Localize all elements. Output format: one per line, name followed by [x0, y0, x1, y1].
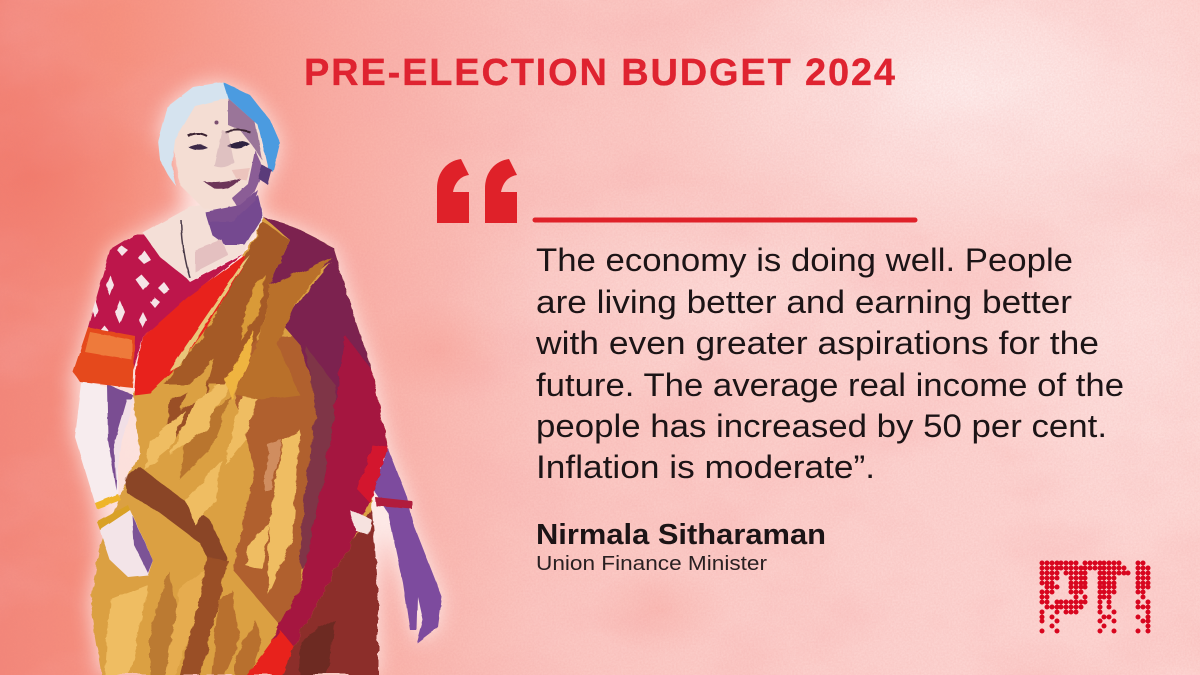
hand and bangles [95, 494, 153, 577]
illustration: portrait of speaker [73, 82, 442, 675]
blouse [88, 235, 243, 368]
quote text: people has increased by 50 per cent. [536, 408, 1107, 444]
quote text: with even greater aspirations for the [535, 325, 1099, 361]
face [172, 96, 266, 212]
watch band [375, 497, 412, 509]
quote text [535, 242, 1124, 485]
saree shoulder shading [263, 217, 372, 440]
facial features [188, 121, 250, 189]
title: PRE-ELECTION BUDGET 2024 [304, 52, 895, 94]
left arm [75, 380, 133, 503]
figure glow [73, 82, 442, 675]
right arm [372, 448, 442, 643]
quote text: are living better and earning better [536, 284, 1072, 320]
quote text: future. The average real income of the [536, 367, 1124, 403]
saree maroon-brown shading [298, 345, 338, 570]
saree peach fleck [264, 440, 282, 490]
blouse white motifs [92, 246, 170, 336]
sleeve band [73, 327, 135, 388]
chest and neck [143, 195, 264, 281]
quote rule line [535, 218, 915, 222]
saree main drape [90, 217, 388, 675]
quote text: The economy is doing well. People [536, 242, 1073, 278]
logo: PTI dotted [1042, 563, 1148, 631]
saree light highlights [105, 375, 300, 675]
speaker role: Union Finance Minister [536, 553, 767, 575]
saree dark folds [125, 375, 262, 675]
saree brown fold band [233, 335, 320, 625]
lower skirt [282, 510, 378, 675]
saree red hem [247, 630, 294, 675]
speaker name: Nirmala Sitharaman [536, 519, 826, 551]
white highlight on fold [350, 510, 372, 535]
icon: quotation marks [437, 159, 517, 223]
red pallu [134, 255, 245, 395]
hair [158, 82, 235, 186]
saree crimson border [262, 335, 388, 675]
quote text: Inflation is moderate”. [536, 449, 875, 485]
